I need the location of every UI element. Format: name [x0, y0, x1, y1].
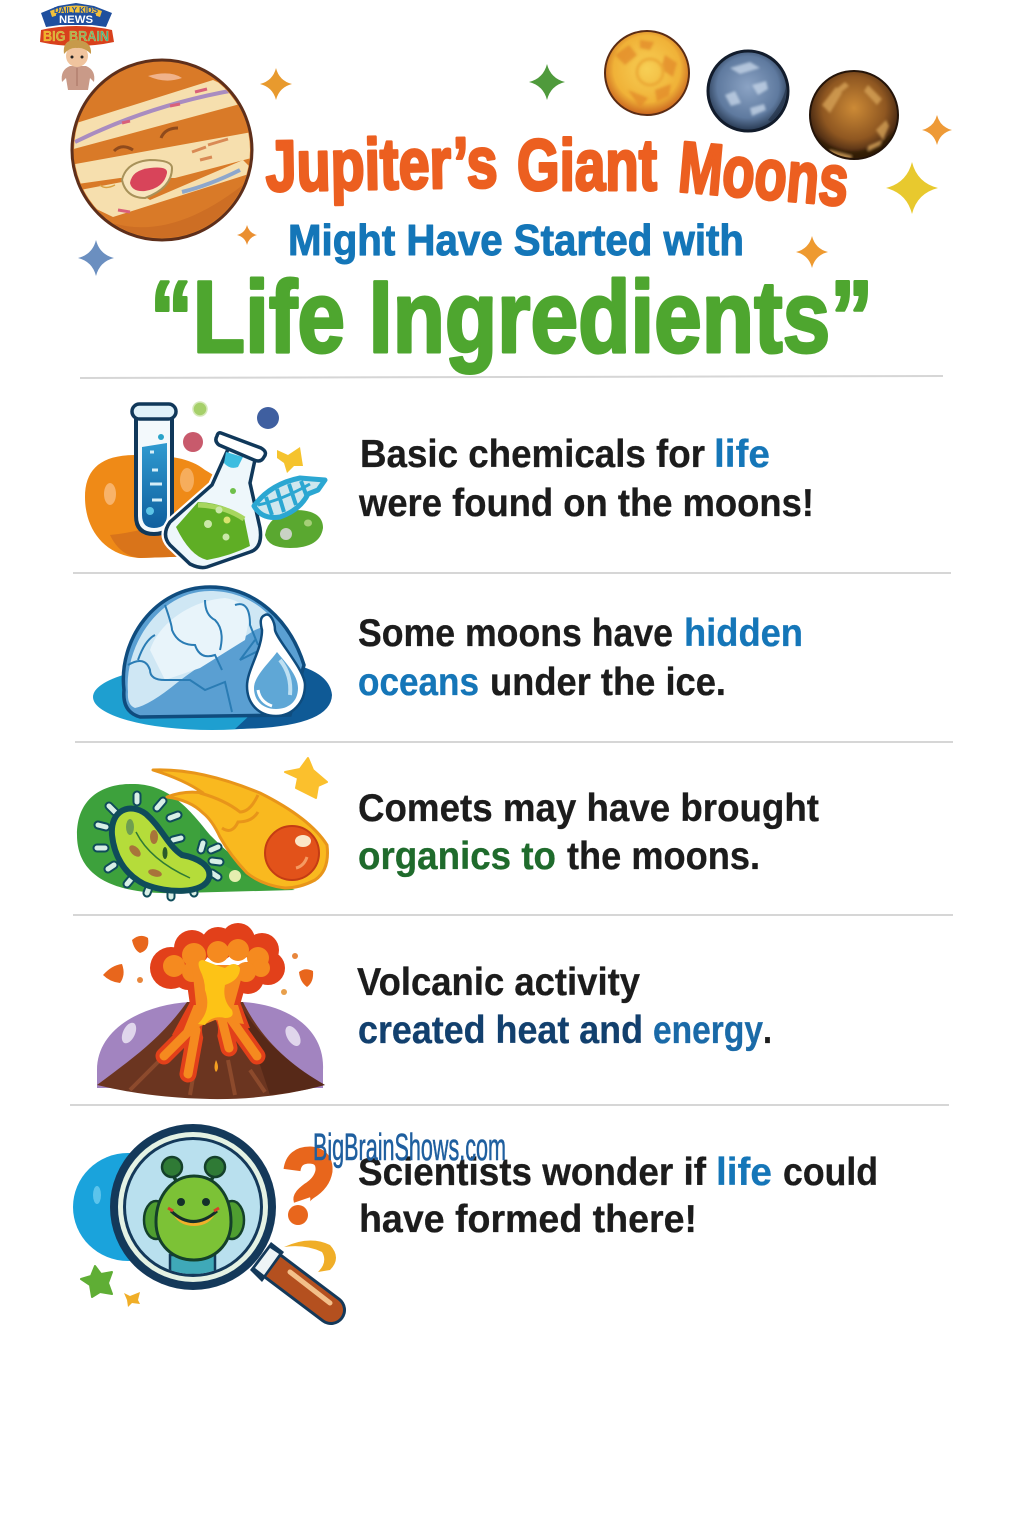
logo: Daily Kids News Big Brain — [40, 3, 114, 90]
illustration: Jupiter — [70, 60, 255, 250]
moon: Callisto — [810, 71, 898, 165]
comet — [153, 770, 328, 888]
eruption cloud — [150, 923, 285, 1005]
logo: Daily Kids News Big Brain: NEWS — [59, 14, 93, 26]
icon: ice dome and droplet — [93, 587, 332, 730]
text: row 2: hidden — [684, 612, 803, 655]
text: row 1: life — [714, 433, 770, 476]
text: row 5: Scientists wonder if — [358, 1151, 707, 1194]
text: row 5 — [358, 1151, 878, 1241]
title: Jupiter's Giant Moons: Moons — [676, 127, 852, 222]
lava bombs — [132, 936, 148, 953]
logo: Daily Kids News Big Brain: DAILY KIDS — [54, 6, 99, 15]
subtitle: Might Have Started with: Might Have Started with — [288, 216, 744, 265]
droplet — [247, 614, 305, 716]
test tube — [136, 418, 172, 534]
text: row 3: Comets may have brought — [358, 787, 819, 830]
icon: volcano — [97, 923, 325, 1099]
dividers — [70, 376, 953, 1105]
text: row 3 — [358, 787, 819, 878]
sparkle stars — [78, 64, 952, 276]
moon: Europa — [708, 51, 790, 131]
text: row 4: Volcanic activity — [357, 961, 640, 1004]
text: row 1 — [358, 433, 814, 525]
mascot — [62, 40, 94, 90]
microbe spikes — [97, 795, 220, 897]
title: Jupiter's Giant Moons — [265, 123, 852, 222]
icon: flasks and DNA — [85, 402, 325, 568]
text: row 2: Some moons have — [358, 612, 673, 655]
moon: Io — [605, 31, 689, 115]
icon: magnifying glass with alien — [73, 1124, 336, 1310]
green blob — [265, 510, 323, 548]
title: Life Ingredients: “Life Ingredients” — [150, 260, 873, 374]
logo: Daily Kids News Big Brain: BIG BRAIN — [43, 28, 109, 45]
bubbles — [193, 402, 207, 416]
text: row 3: the moons. — [567, 835, 760, 878]
star — [277, 447, 303, 473]
text: row 3: organics to — [358, 835, 556, 878]
watermark: BigBrainShows.com: BigBrainShows.com — [313, 1127, 506, 1169]
text: row 4: . — [763, 1009, 772, 1052]
lava flows — [164, 1015, 257, 1074]
text: row 1: Basic chemicals for — [360, 433, 705, 476]
text: row 2: under the ice. — [490, 661, 726, 704]
DNA — [254, 478, 325, 518]
handle — [274, 1267, 331, 1310]
title: Jupiter's Giant Moons: Jupiter’s — [265, 123, 498, 207]
text: row 4: created heat and — [358, 1009, 643, 1052]
flask — [166, 447, 261, 568]
text: row 2 — [358, 612, 803, 704]
title: Jupiter's Giant Moons: Giant — [517, 126, 657, 206]
lens — [110, 1124, 276, 1290]
text: row 2: oceans — [358, 661, 479, 704]
text: row 4: energy — [653, 1009, 763, 1052]
text: row 5: life — [716, 1151, 772, 1194]
text: row 5: have formed there! — [359, 1198, 697, 1241]
text: row 1: were found on the moons! — [358, 482, 814, 525]
text: row 4 — [357, 961, 772, 1052]
icon: comet and microbe — [77, 758, 328, 897]
text: row 5: could — [783, 1151, 878, 1194]
question mark — [292, 1155, 324, 1200]
